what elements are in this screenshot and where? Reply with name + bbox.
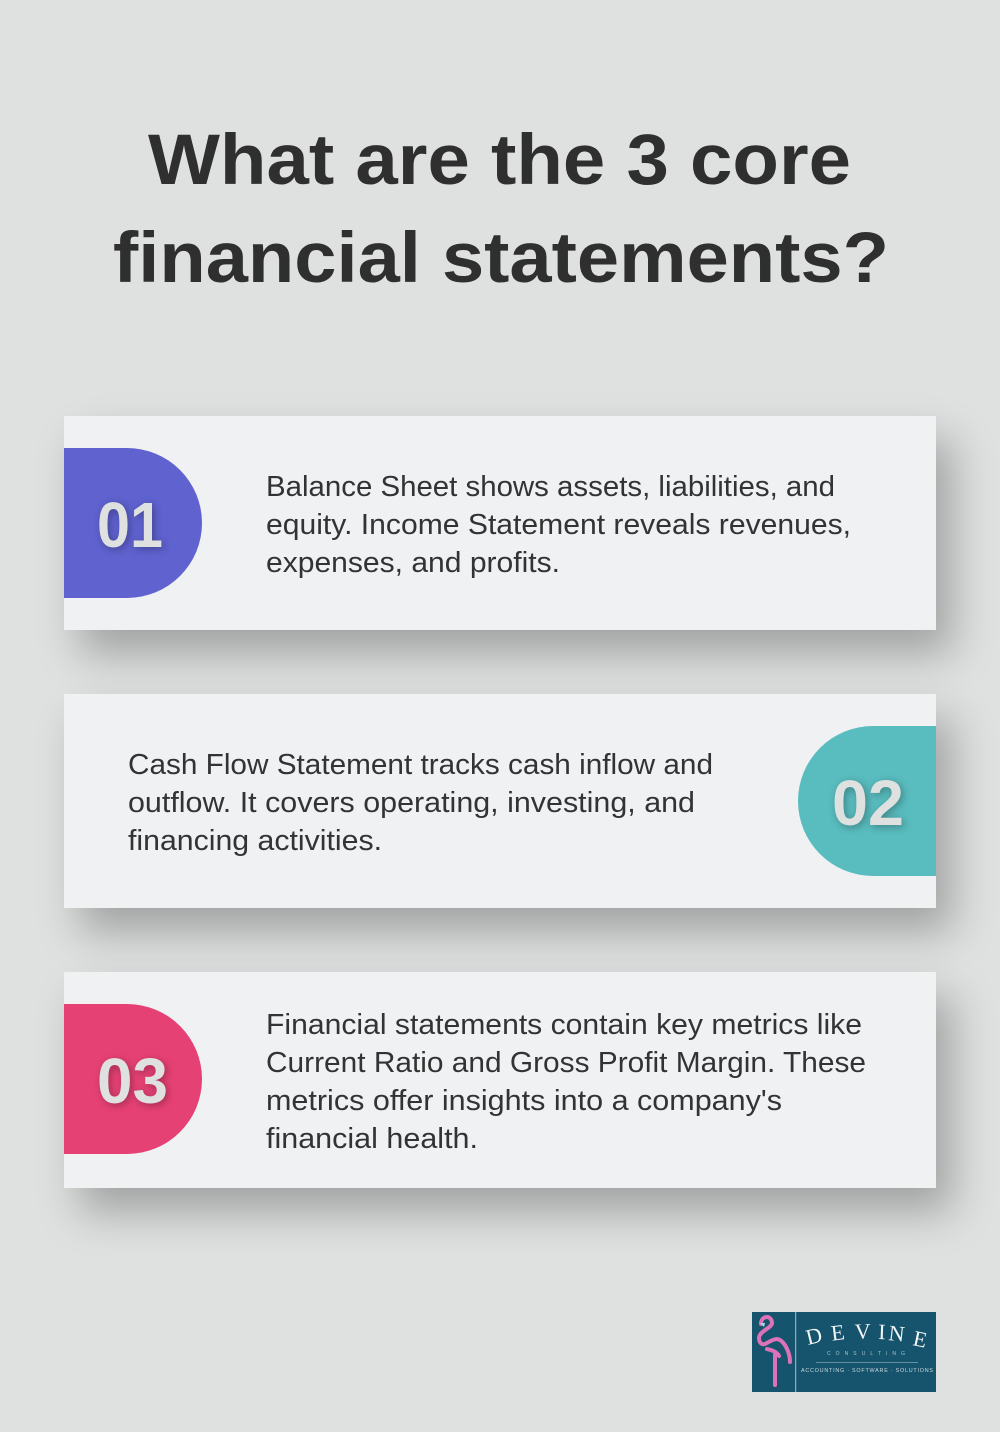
text: key metrics: financial health. [266, 1123, 478, 1155]
text: cash flow [128, 749, 713, 857]
title: financial statements? [113, 219, 889, 298]
text: balance sheet: equity. Income Statement reveals revenues, [266, 509, 851, 541]
panel: cash flow statement [64, 694, 936, 908]
badge 02 [798, 726, 936, 876]
panel: balance sheet and income statement [64, 416, 936, 630]
text: cash flow: outflow. It covers operating, investing, and [128, 787, 695, 819]
logo: Devine Consulting: ACCOUNTING · SOFTWARE · SOLUTIONS [801, 1368, 933, 1374]
text: balance sheet [266, 471, 851, 579]
text: key metrics: Financial statements contain key metrics like [266, 1009, 862, 1041]
text: key metrics: Current Ratio and Gross Profit Margin. These [266, 1047, 866, 1079]
logo: Devine Consulting: DEVINE [803, 1318, 929, 1353]
text: balance sheet: expenses, and profits. [266, 547, 560, 579]
title [113, 121, 889, 298]
title: What are the 3 core [148, 121, 851, 200]
logo: Devine Consulting [752, 1312, 936, 1392]
badge 01 [64, 448, 202, 598]
text: balance sheet: Balance Sheet shows assets, liabilities, and [266, 471, 835, 503]
text: cash flow: financing activities. [128, 825, 382, 857]
logo: Devine Consulting: CONSULTING [827, 1351, 905, 1357]
badge 01: 01 [97, 489, 163, 561]
badge 03: 03 [97, 1045, 168, 1117]
badge 03 [64, 1004, 202, 1154]
text: cash flow: Cash Flow Statement tracks cash inflow and [128, 749, 713, 781]
badge 02: 02 [832, 767, 904, 839]
panel: key metrics [64, 972, 936, 1188]
text: key metrics [266, 1009, 866, 1155]
icon: flamingo [759, 1317, 790, 1385]
text: key metrics: metrics offer insights into a company's [266, 1085, 782, 1117]
